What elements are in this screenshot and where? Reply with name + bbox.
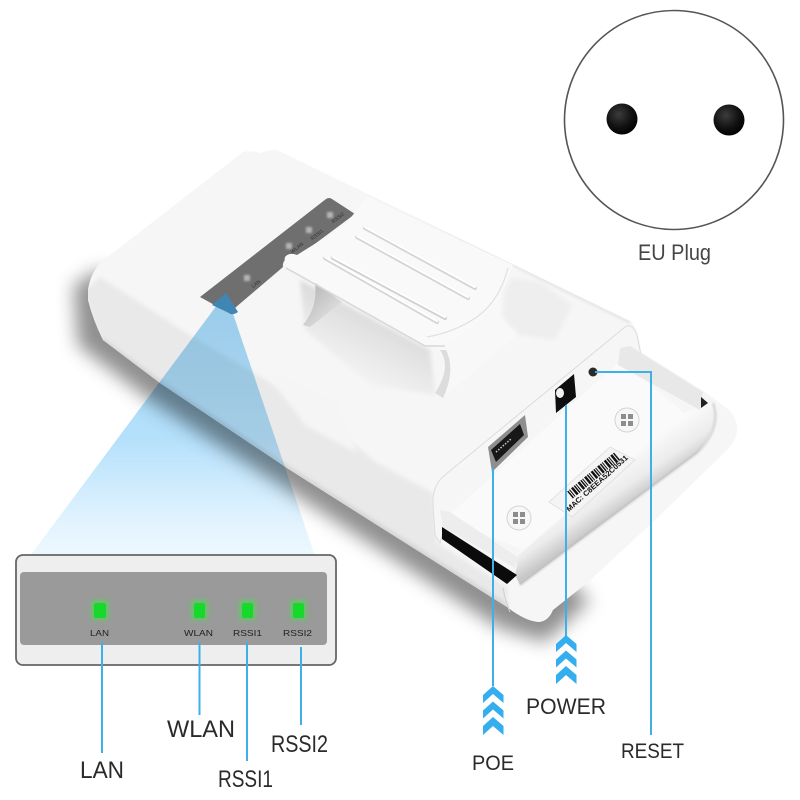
label: RSSI2: RSSI2 bbox=[271, 731, 328, 758]
lower side band bbox=[84, 277, 507, 612]
label: LAN: LAN bbox=[80, 757, 124, 784]
cone tip over status panel bbox=[212, 293, 238, 314]
label: RSSI1: RSSI1 bbox=[218, 766, 273, 793]
label: RESET: RESET bbox=[621, 739, 684, 763]
LEDs bbox=[94, 603, 304, 618]
port wall bbox=[433, 326, 641, 543]
status panel on device bbox=[200, 198, 355, 313]
handle: right leg bbox=[427, 270, 517, 398]
small panel labels: WLAN bbox=[290, 241, 305, 255]
EU plug circle bbox=[564, 10, 784, 230]
POE chevrons bbox=[483, 686, 504, 735]
RESET pointer bbox=[595, 372, 651, 735]
inset LED labels: LAN bbox=[90, 628, 109, 638]
shade under handle bbox=[300, 280, 435, 395]
small panel labels: RSSI2 bbox=[331, 211, 346, 225]
small panel labels bbox=[251, 211, 346, 290]
inset LED labels: RSSI2 bbox=[283, 628, 312, 638]
barcode bbox=[570, 456, 617, 495]
inset LED labels: WLAN bbox=[184, 628, 213, 638]
LED glows bbox=[91, 600, 307, 620]
power jack bbox=[555, 374, 576, 413]
tray front wall bbox=[515, 405, 715, 585]
RSSI2 pointer bbox=[300, 647, 302, 725]
small panel labels: RSSI1 bbox=[310, 228, 325, 242]
RJ45 port bbox=[488, 415, 528, 472]
screw mark lower bbox=[507, 506, 531, 530]
MAC label bbox=[549, 447, 635, 517]
plug hole right bbox=[714, 104, 744, 136]
MAC text: MAC: C8EEA52C0531 bbox=[564, 453, 630, 513]
projection cone bbox=[30, 293, 315, 556]
handle plate bbox=[285, 197, 513, 346]
bar lower edge bbox=[286, 268, 445, 346]
label: POWER: POWER bbox=[526, 694, 606, 719]
body silhouette bbox=[88, 150, 737, 622]
WLAN pointer bbox=[198, 642, 200, 715]
label: WLAN: WLAN bbox=[167, 716, 235, 743]
inset LED labels: RSSI1 bbox=[233, 628, 262, 638]
LED inset panel bbox=[16, 555, 336, 665]
plug hole left bbox=[606, 104, 638, 134]
upper ridge line bbox=[449, 234, 630, 322]
plate curved outline bbox=[427, 268, 508, 337]
device shadow bbox=[74, 270, 590, 642]
small LEDs bbox=[244, 212, 333, 281]
screw mark upper bbox=[615, 408, 639, 432]
lighter fold on the flank bbox=[284, 392, 352, 448]
cover seam bbox=[503, 588, 510, 612]
inset LED labels bbox=[90, 628, 312, 638]
label: POE: POE bbox=[472, 751, 514, 775]
reset hole bbox=[588, 368, 598, 376]
black slot bbox=[442, 527, 517, 584]
POWER chevrons bbox=[556, 635, 576, 684]
dark edge along the bottom bbox=[100, 340, 507, 607]
cover lip shading bbox=[520, 403, 715, 585]
small panel labels: LAN bbox=[251, 279, 262, 290]
corner slot bbox=[701, 397, 708, 408]
RSSI1 pointer bbox=[246, 642, 248, 761]
grey recess right of handle bbox=[503, 278, 572, 340]
handle: left leg bbox=[303, 283, 342, 327]
lower-left tray tab bbox=[440, 510, 519, 568]
body shading, clipped to silhouette bbox=[88, 234, 630, 608]
POE pointer bbox=[492, 468, 494, 686]
POWER pointer bbox=[565, 405, 567, 636]
inset grey strip bbox=[20, 572, 327, 645]
LAN pointer bbox=[101, 642, 103, 753]
EU Plug caption: EU Plug bbox=[638, 240, 711, 265]
upper-right tray tab bbox=[618, 346, 703, 410]
device: outdoor CPE body bbox=[74, 150, 737, 642]
tray floor bbox=[446, 360, 684, 550]
handle ribs bbox=[325, 227, 475, 322]
